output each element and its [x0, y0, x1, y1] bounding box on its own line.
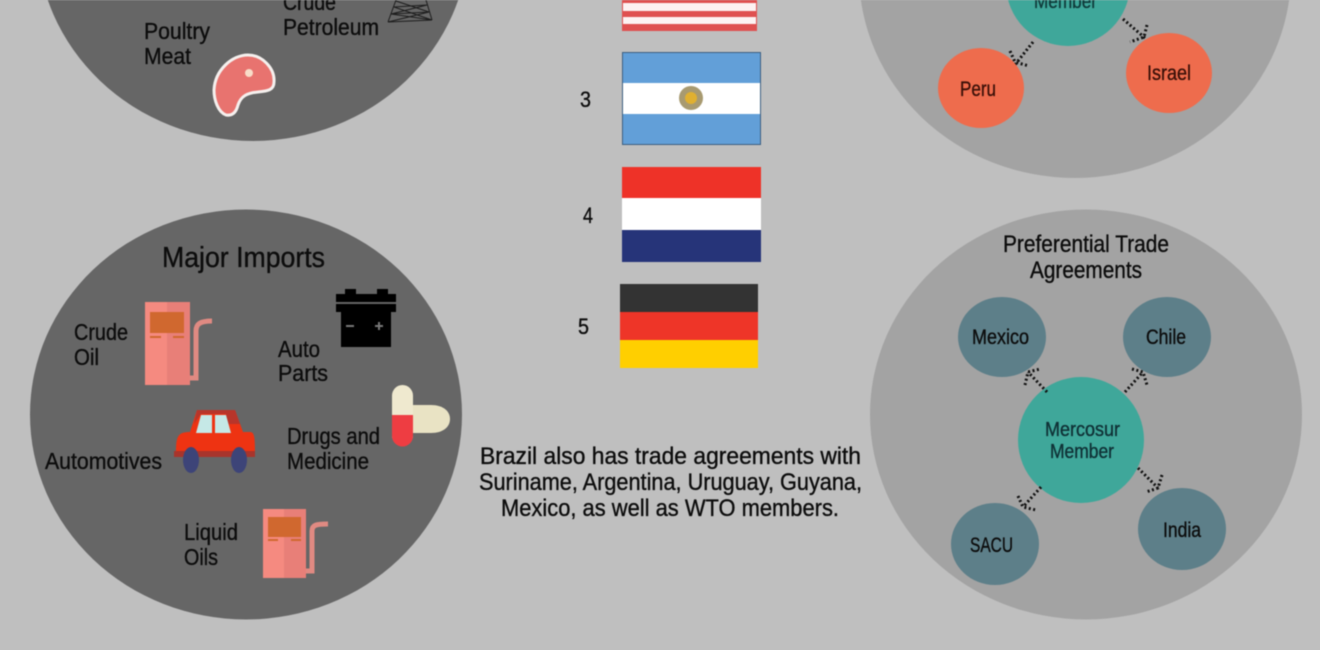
rank 4: 4 — [583, 203, 593, 228]
node: india: India — [1163, 519, 1201, 542]
panel: free trade agreements — [859, 0, 1291, 178]
icon: car — [174, 410, 255, 473]
flag: netherlands — [622, 167, 761, 262]
arrow: to india — [1138, 468, 1162, 492]
node: sacu: SACU — [970, 534, 1013, 557]
label: liquid oils — [184, 519, 238, 570]
text block: other trade agreements: Mexico, as well as WTO members. — [501, 495, 839, 522]
label: crude petroleum: Petroleum — [283, 14, 379, 40]
icon: fuel pump — [145, 302, 212, 385]
node: mercosur member — [1018, 377, 1144, 503]
label: poultry meat: Poultry — [144, 18, 210, 44]
node: mexico — [958, 297, 1046, 377]
icon: fuel pump — [263, 509, 328, 578]
label: crude oil: Oil — [74, 344, 99, 370]
label: drugs and medicine — [287, 423, 380, 474]
label: poultry meat — [144, 18, 210, 69]
heading: major imports: Major Imports — [162, 242, 325, 274]
text block: other trade agreements — [479, 443, 862, 522]
icon: pills — [392, 385, 450, 447]
node: sacu — [951, 503, 1039, 585]
node: india — [1138, 488, 1226, 570]
label: liquid oils: Liquid — [184, 519, 238, 545]
node: mercosur member: Mercosur — [1045, 419, 1120, 441]
arrow: to sacu — [1018, 487, 1041, 510]
label: auto parts — [278, 336, 328, 386]
label: automotives: Automotives — [45, 448, 162, 474]
heading: preferential trade agreements: Preferential Trade — [1003, 231, 1169, 258]
flag: united states — [622, 0, 757, 31]
node: chile — [1123, 297, 1211, 377]
icon: oil derrick — [388, 0, 432, 22]
heading: preferential trade agreements — [1003, 231, 1169, 284]
node: israel — [1126, 33, 1212, 113]
label: liquid oils: Oils — [184, 544, 218, 570]
label: auto parts: Auto — [278, 336, 320, 362]
panel: preferential trade agreements — [870, 210, 1302, 620]
node: mexico: Mexico — [972, 326, 1029, 349]
text block: other trade agreements: Suriname, Argentina, Uruguay, Guyana, — [479, 469, 862, 496]
panel: major exports — [37, 0, 469, 141]
node: mercosur member — [1006, 0, 1130, 46]
node: peru — [938, 48, 1024, 128]
node: peru: Peru — [960, 78, 996, 101]
arrow: to peru — [1010, 42, 1033, 66]
label: auto parts: Parts — [278, 360, 328, 386]
node: israel: Israel — [1147, 62, 1191, 85]
arrow: to chile — [1125, 369, 1147, 392]
label: drugs and medicine: Medicine — [287, 448, 369, 474]
label: poultry meat: Meat — [144, 43, 192, 69]
rank 5: 5 — [578, 314, 589, 339]
arrow: to mexico — [1025, 369, 1047, 392]
label: crude oil — [74, 319, 128, 370]
label: drugs and medicine: Drugs and — [287, 423, 380, 449]
node: mercosur member: Member — [1050, 441, 1114, 463]
rank 3: 3 — [580, 87, 591, 112]
label: crude oil: Crude — [74, 319, 128, 345]
text block: other trade agreements: Brazil also has trade agreements with — [480, 443, 861, 470]
panel: major imports — [30, 210, 462, 620]
arrow: to israel — [1123, 19, 1147, 42]
icon: poultry meat — [214, 55, 274, 115]
icon: car battery — [336, 289, 396, 347]
flag: germany — [620, 284, 758, 368]
label: crude petroleum — [283, 0, 379, 40]
flag: argentina — [622, 52, 760, 144]
heading: preferential trade agreements: Agreements — [1030, 257, 1142, 284]
node: chile: Chile — [1146, 326, 1186, 349]
